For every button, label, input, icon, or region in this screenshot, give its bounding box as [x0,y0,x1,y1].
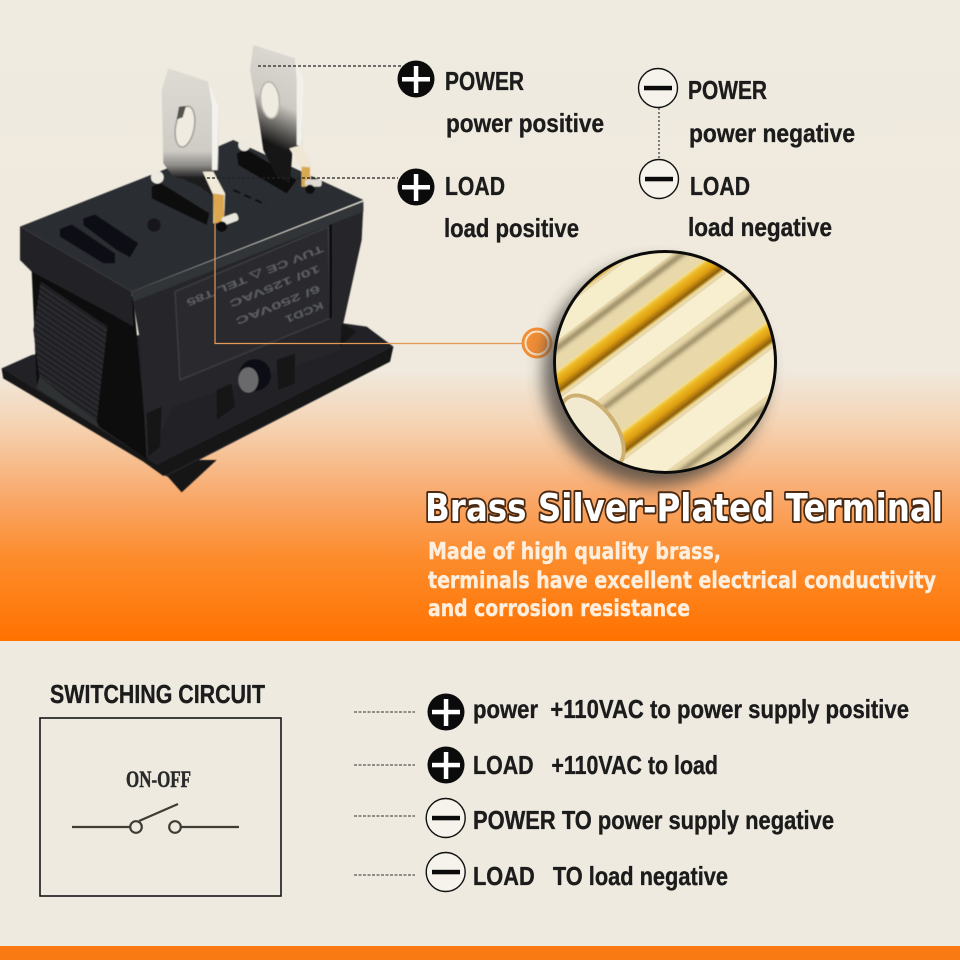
molded rating text: 10/ 125VAC [228,262,321,309]
molded rating text: 6/ 250VAC [234,282,321,326]
ribbed rocker side [33,282,107,422]
label: load negative [688,171,832,242]
description text [428,539,936,622]
icon: minus [426,852,465,892]
icon: power plus [398,60,434,98]
label: power positive [445,66,604,138]
label: load negative: LOAD [690,171,750,201]
screw mark on top [147,218,161,232]
label: load positive [444,171,579,243]
lid left band [20,227,133,327]
rocker lower edge [37,377,100,428]
label: load negative: load negative [688,212,832,242]
description text: Made of high quality brass, [428,539,721,565]
label: load positive: LOAD [445,171,505,201]
icon: power minus [638,68,678,108]
left terminal base [152,183,209,225]
screw hole [238,359,271,393]
icon: minus [426,798,465,838]
dark recess beside body [32,270,148,460]
wiring row 1 [354,694,909,730]
row 2 text: LOAD +110VAC to load [473,750,718,780]
molded rating text: KCD1 [283,299,325,324]
right terminal base [237,149,297,193]
body top face [20,140,363,292]
label: load positive: load positive [444,213,579,243]
molded rating text [184,242,325,326]
lower molded tabs [147,323,357,457]
rocker switch product illustration [2,45,393,492]
label: power positive: power positive [446,108,604,138]
label: power negative [688,75,855,148]
icon: load minus [640,160,678,198]
label: power positive: POWER [445,66,524,96]
icon: load plus [398,168,434,206]
wiring row 3 [354,798,834,838]
target marker [522,328,552,358]
dotted connector between negative icons [658,108,660,160]
mounting flange [2,323,393,477]
left silver terminal [151,68,239,232]
dotted leader: power positive [258,65,402,67]
dotted leader: load positive [177,177,398,179]
molded label panel [175,227,330,380]
row 4 text: LOAD TO load negative [473,861,728,891]
icon: plus [428,746,464,784]
circuit diagram box [40,718,281,896]
body front wall [132,207,363,460]
description text: and corrosion resistance [428,596,690,622]
ON-OFF label: ON-OFF [126,767,191,792]
lower panel background [0,641,960,946]
top clip ridge [60,214,138,263]
switching circuit heading: SWITCHING CIRCUIT [50,679,265,709]
tick marks on top face [233,190,267,205]
brass terminal leader line [215,222,525,344]
label: power negative: POWER [688,75,767,105]
row 3 text: POWER TO power supply negative [473,805,834,835]
molded rating text: TUV CE △ TEL T85 [184,242,325,308]
icon: plus [428,694,464,730]
brass magnified circle [531,250,779,498]
wiring row 2 [354,746,718,784]
rocker tab [163,460,217,492]
upper background with orange gradient [0,0,960,641]
vertical groove [327,218,335,318]
right silver terminal [238,45,322,194]
label: power negative: power negative [689,118,855,148]
bottom orange strip [0,946,960,960]
lid right band [132,202,363,302]
switch symbol [72,804,239,833]
wiring row 4 [354,852,728,892]
